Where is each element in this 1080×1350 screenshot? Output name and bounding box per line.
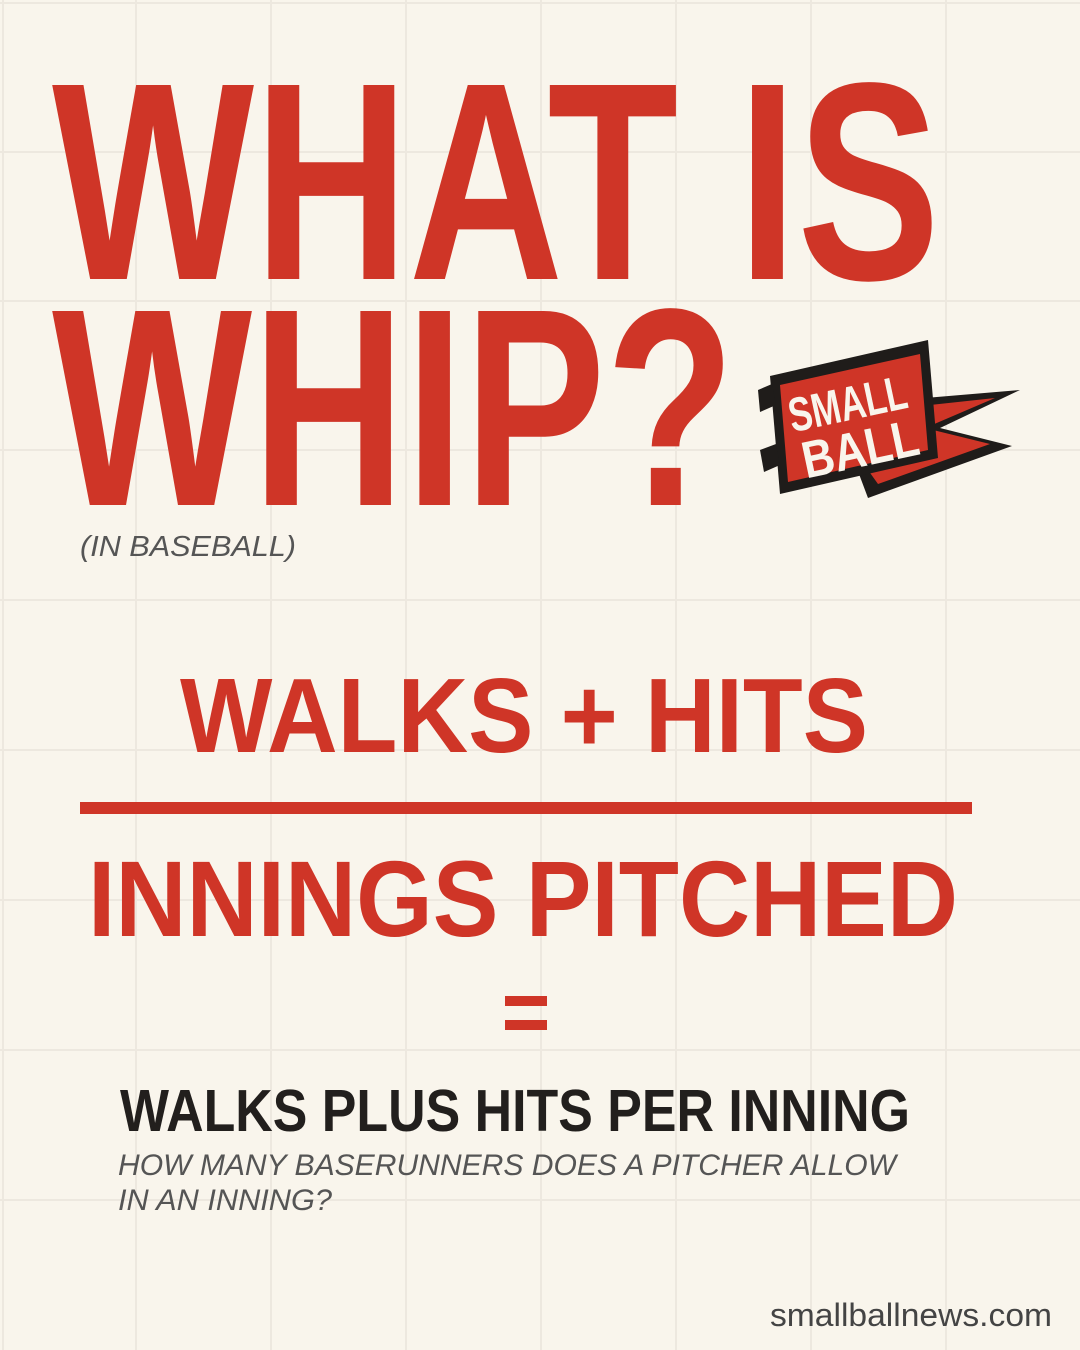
subtitle: in baseball: (IN BASEBALL) bbox=[80, 531, 296, 563]
title: WHIP? bbox=[52, 250, 735, 565]
title bbox=[52, 24, 940, 565]
definition description bbox=[118, 1149, 899, 1217]
logo: small ball pennant: BALL bbox=[797, 409, 924, 490]
formula numerator: WALKS + HITS bbox=[180, 657, 868, 775]
definition heading: WALKS PLUS HITS PER INNING bbox=[120, 1078, 910, 1144]
logo: small ball pennant: SMALL bbox=[784, 366, 912, 443]
fraction bar bbox=[80, 802, 972, 814]
footer url: smallballnews.com bbox=[770, 1297, 1052, 1333]
definition description: IN AN INNING? bbox=[118, 1184, 332, 1217]
equals sign bbox=[505, 996, 547, 1030]
definition description: HOW MANY BASERUNNERS DOES A PITCHER ALLOW bbox=[118, 1149, 899, 1182]
formula denominator: INNINGS PITCHED bbox=[88, 838, 958, 959]
logo: small ball pennant bbox=[758, 340, 1020, 498]
